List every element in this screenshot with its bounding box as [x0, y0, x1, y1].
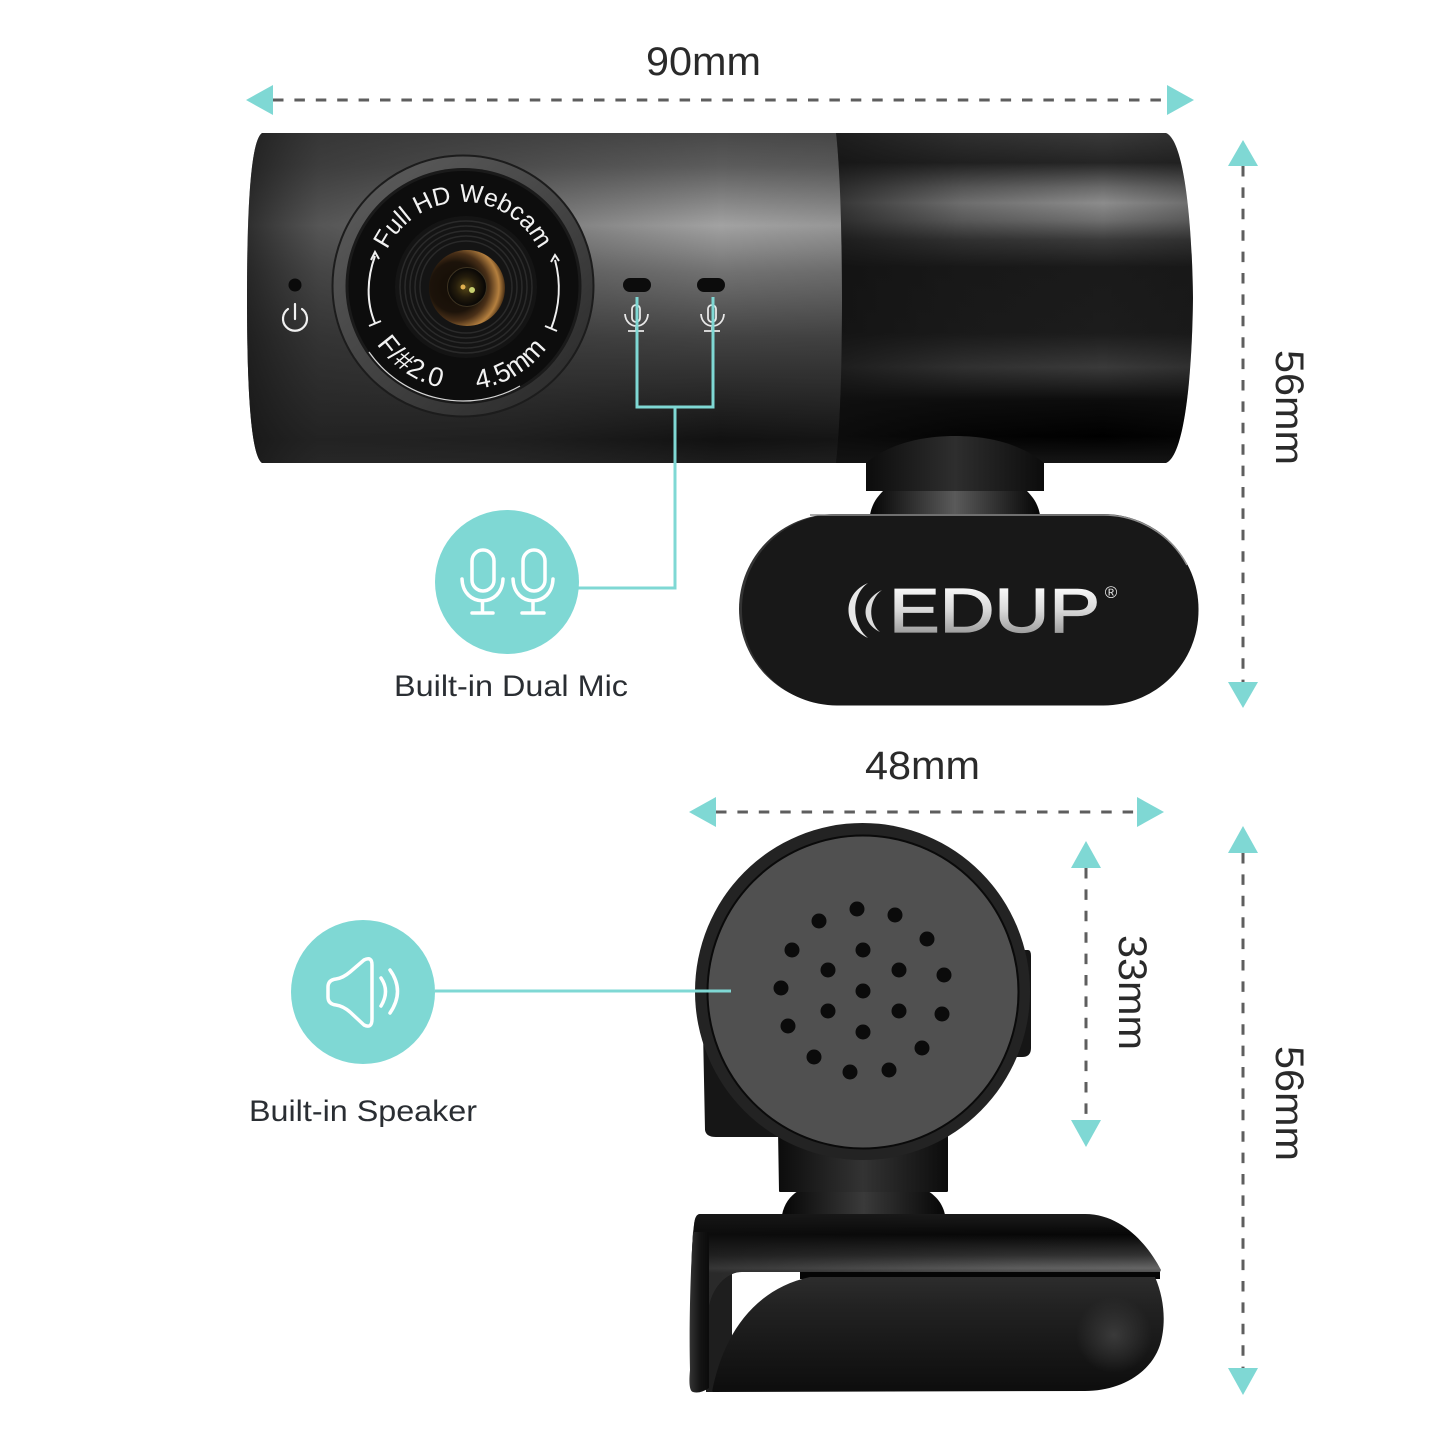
clip slit [800, 1270, 1160, 1279]
clip front [739, 514, 1198, 706]
webcam side view [689, 823, 1164, 1392]
lens ring arrows [369, 252, 559, 331]
mic slots [623, 278, 725, 292]
dimension: 56mm height top [1228, 140, 1311, 708]
EDUP logo: EDUP [889, 577, 1100, 646]
dimension: 90mm width top [246, 40, 1194, 115]
callout: built-in speaker: Built-in Speaker [249, 1095, 477, 1128]
speaker housing [695, 823, 1030, 1160]
dimension: 48mm width side: 48mm [865, 744, 980, 788]
lens ring text [373, 184, 548, 388]
lens ring text: Full HD Webcam [373, 184, 548, 248]
clip upper arm [691, 1214, 1161, 1305]
dimension: 90mm width top: 90mm [646, 40, 761, 84]
dimension: 56mm height side: 56mm [1267, 1046, 1311, 1161]
webcam front view [247, 133, 1198, 706]
callout: built-in dual mic [394, 510, 628, 703]
dimension: 33mm height: 33mm [1110, 935, 1154, 1050]
dimension: 48mm width side [689, 744, 1164, 827]
speaker holes [774, 902, 952, 1080]
stand neck [866, 436, 1044, 491]
camera body right section [836, 133, 1193, 463]
clip hinge inner [706, 1272, 732, 1392]
dimension: 33mm height [1071, 841, 1154, 1147]
EDUP logo [848, 577, 1118, 646]
lens assembly [332, 154, 594, 418]
dimension: 56mm height top: 56mm [1267, 350, 1311, 465]
small mic icons [625, 305, 724, 331]
lens ring text: 4.5mm [476, 342, 546, 388]
dimension: 56mm height side [1228, 826, 1311, 1395]
stand ball [870, 490, 1040, 515]
camera body left section [247, 133, 848, 463]
rear bracket [703, 950, 1031, 1137]
icon: speaker [291, 920, 435, 1064]
lens ring text: F/#2.0 [378, 334, 443, 386]
power indicator [283, 278, 307, 331]
clip lower jaw [712, 1277, 1164, 1392]
callout: built-in speaker [249, 920, 477, 1128]
icon: dual microphones [435, 510, 579, 654]
clip outer strip [689, 1232, 709, 1392]
callout: built-in dual mic: Built-in Dual Mic [394, 670, 628, 703]
EDUP logo: ® [1105, 583, 1118, 602]
swivel ball and neck [778, 1130, 948, 1215]
speaker connector line [435, 990, 731, 992]
dual mic connector lines [578, 297, 713, 588]
